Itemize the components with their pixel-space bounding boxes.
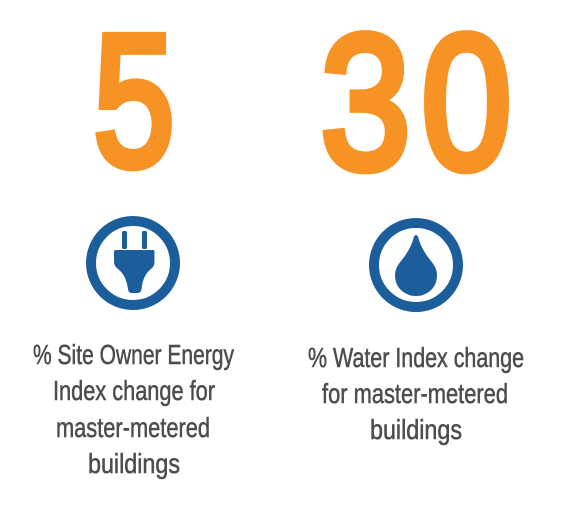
text: water index label (308, 342, 524, 445)
text: site owner energy label: Index change for (53, 375, 215, 406)
icon: water drop (374, 223, 458, 307)
number: 30 (320, 0, 512, 209)
icon: electric plug (91, 221, 175, 305)
text: water index label: for master-metered (322, 378, 508, 409)
number: 5: 5 (94, 0, 174, 205)
text: water index label: buildings (370, 414, 462, 445)
text: site owner energy label: master-metered (56, 412, 210, 443)
number: 30: 3 (320, 0, 410, 209)
number: 30: 0 (422, 0, 512, 209)
text: site owner energy label: % Site Owner Energy (33, 339, 234, 370)
text: site owner energy label (33, 339, 234, 479)
text: site owner energy label: buildings (88, 448, 180, 479)
